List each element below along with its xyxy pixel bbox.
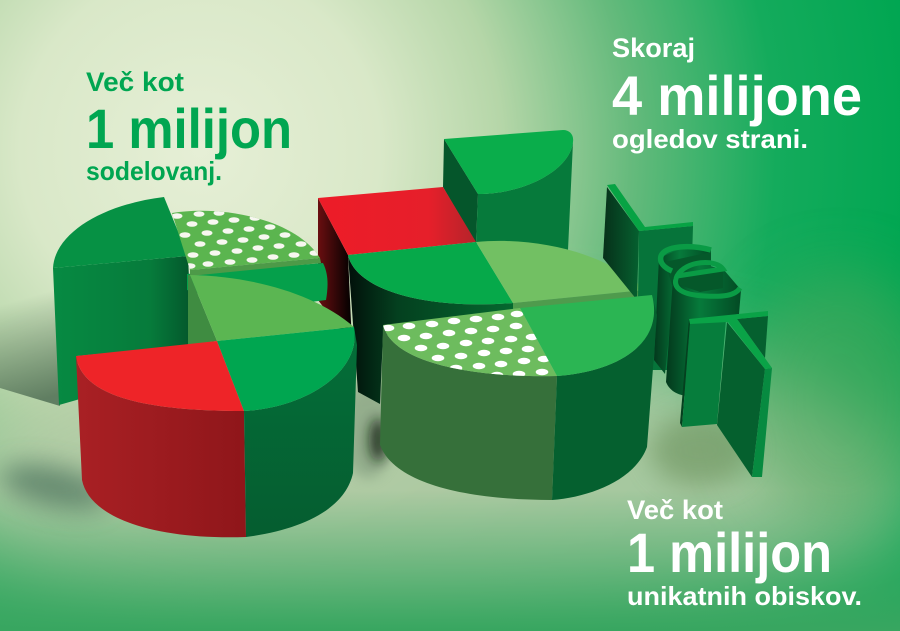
slice: green wedge side xyxy=(244,327,357,537)
block: red wedge left face xyxy=(318,198,352,345)
text: participations: 1 milijon xyxy=(86,97,292,160)
text: unique visits xyxy=(627,495,862,611)
slice: dotted wedge xyxy=(172,210,321,276)
text: unique visits: unikatnih obiskov. xyxy=(627,581,862,611)
floor shadows xyxy=(0,290,750,518)
text: page views: Skoraj xyxy=(612,33,695,63)
pie B dark side xyxy=(348,255,513,404)
slice: dark green wedge top xyxy=(53,197,188,268)
text: participations xyxy=(86,67,292,186)
chart: front-left pie xyxy=(76,275,357,537)
slice: red wedge side xyxy=(76,356,246,537)
chart: back-left pie xyxy=(53,197,328,405)
letter L xyxy=(603,184,693,370)
slice: dotted wedge top xyxy=(382,308,557,378)
chart: front-right pie xyxy=(380,295,657,500)
slice: red wedge top xyxy=(76,341,244,411)
chart: back-right stepped pie xyxy=(318,130,646,404)
slice: green wedge top xyxy=(217,327,355,411)
slice: green wedge side xyxy=(552,295,657,500)
text: participations: Več kot xyxy=(86,67,184,97)
slice: green wedge behind xyxy=(187,263,328,310)
slice: light green wedge top xyxy=(190,275,354,341)
slice: green wedge top xyxy=(348,242,513,304)
letter e xyxy=(666,262,741,396)
letter c xyxy=(654,246,711,374)
block: tall green wedge xyxy=(443,130,573,250)
slice: light green wedge side xyxy=(188,275,217,345)
text: page views xyxy=(612,33,862,154)
slice: dark green wedge side xyxy=(53,256,192,405)
text: page views: 4 milijone xyxy=(612,64,862,127)
text: unique visits: 1 milijon xyxy=(627,521,832,584)
slice: green wedge top xyxy=(520,295,654,376)
slice: light green wedge top xyxy=(476,241,646,309)
letter T xyxy=(680,311,772,477)
block: red wedge top xyxy=(318,187,476,255)
text: unique visits: Več kot xyxy=(627,495,723,525)
slice: dotted wedge side xyxy=(380,325,557,500)
text: participations: sodelovanj. xyxy=(86,156,222,186)
text: page views: ogledov strani. xyxy=(612,124,808,154)
